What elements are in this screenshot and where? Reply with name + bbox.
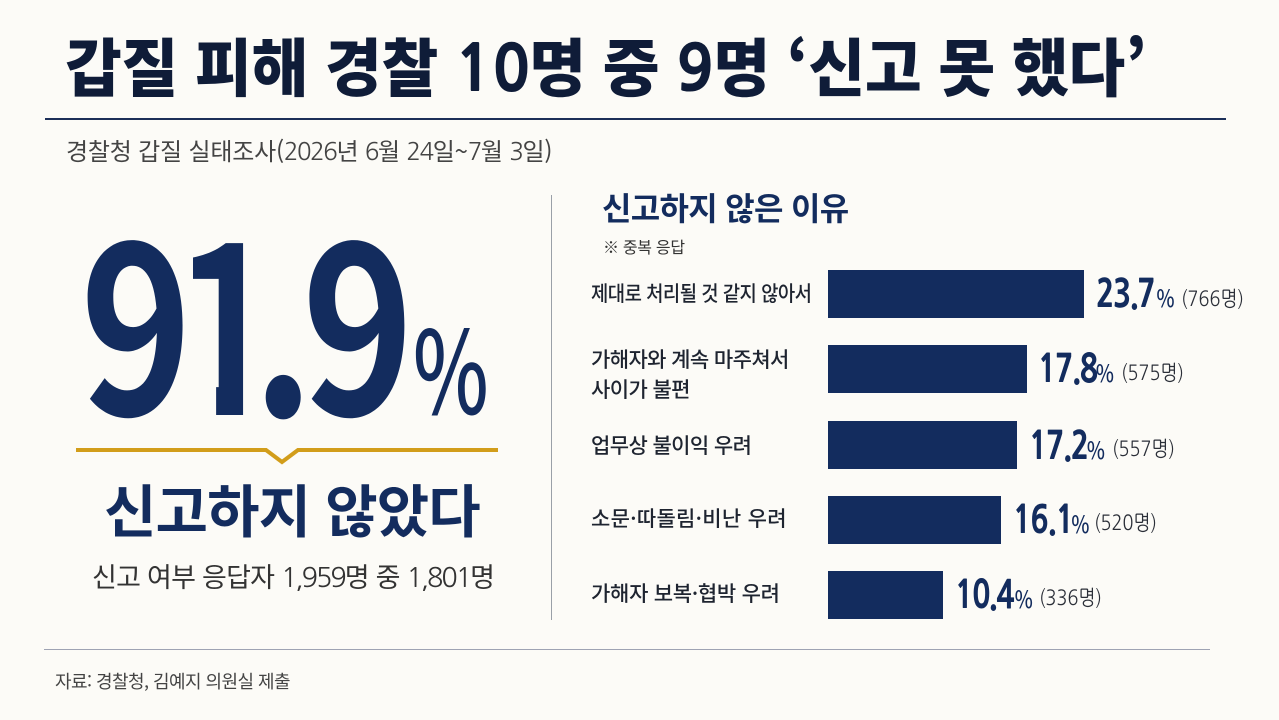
row 3 label: 업무상 불이익 우려 <box>591 430 751 460</box>
row 2 label: 사이가 불편 <box>591 374 690 404</box>
row 1 bar <box>828 270 1084 318</box>
row 2 value: 17.8% <box>1038 350 1114 389</box>
big number 91.9: 9 <box>302 146 414 482</box>
row 4 count: (520명) <box>1094 513 1157 534</box>
gold divider with notch <box>76 448 498 464</box>
subtitle: 경찰청 갑질 실태조사(2026년 6월 24일~7월 3일) <box>66 132 552 167</box>
headline: did not report: 신고하지 않았다 <box>104 467 480 549</box>
big number 91.9 <box>80 146 414 482</box>
panel: reasons chart <box>602 184 848 258</box>
row 3 bar <box>828 421 1017 469</box>
big number 91.9: . <box>252 146 314 482</box>
row 2 label: 가해자와 계속 마주쳐서 <box>591 344 789 374</box>
row 1 count: (766명) <box>1181 289 1244 310</box>
row 4 value: 16.1% <box>1013 501 1089 540</box>
row 5 count: (336명) <box>1039 588 1102 609</box>
multiple response note: ※ 중복 응답 <box>603 234 685 258</box>
row 3 count: (557명) <box>1112 439 1175 460</box>
row 5 label: 가해자 보복·협박 우려 <box>591 578 780 608</box>
big number 91.9: 1 <box>173 146 285 482</box>
respondents note: 신고 여부 응답자 1,959명 중 1,801명 <box>92 556 494 595</box>
row 1 value: 23.7% <box>1096 275 1175 314</box>
row 4 bar <box>828 496 1001 544</box>
row 2 bar <box>828 345 1027 393</box>
row 2 count: (575명) <box>1121 363 1184 384</box>
title: 갑질 피해 경찰 10명 중 9명 ‘신고 못 했다’ <box>65 19 1146 110</box>
row 1 label: 제대로 처리될 것 같지 않아서 <box>591 278 811 308</box>
row 2 label <box>591 344 789 404</box>
source note: 자료: 경찰청, 김예지 의원실 제출 <box>55 668 290 694</box>
big number 91.9: 9 <box>80 146 192 482</box>
panel: key figure <box>76 146 498 595</box>
row 5 value: 10.4% <box>955 576 1033 615</box>
row 5 bar <box>828 571 943 619</box>
row 4 label: 소문·따돌림·비난 우려 <box>591 503 787 533</box>
row 3 value: 17.2% <box>1029 427 1105 466</box>
percent sign: % <box>413 282 489 448</box>
chart heading: 신고하지 않은 이유 <box>602 184 848 230</box>
